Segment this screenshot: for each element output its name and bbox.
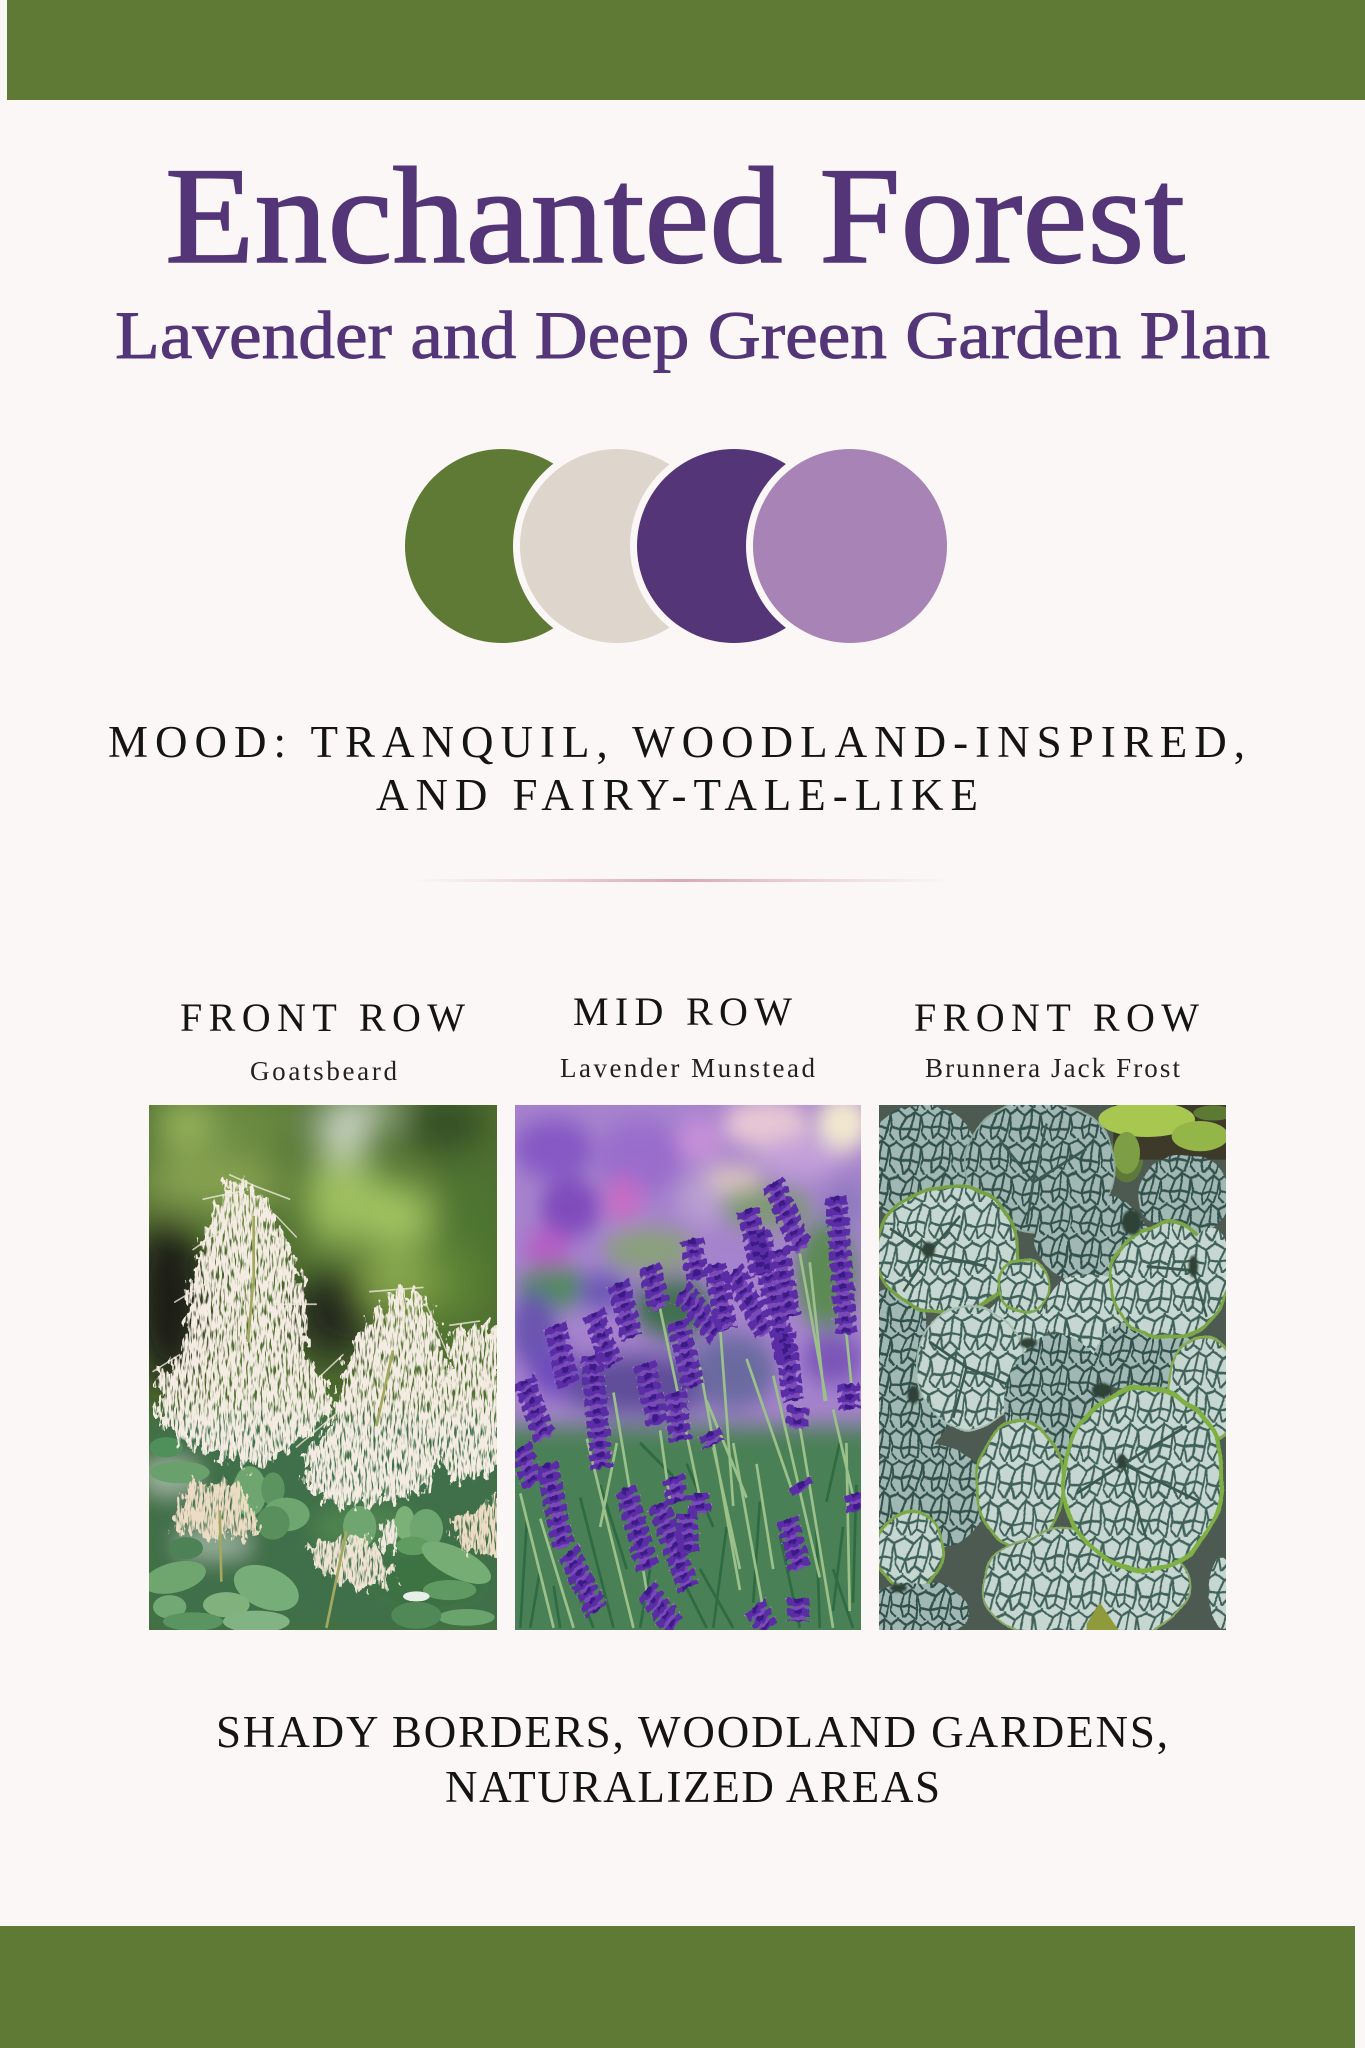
plant name: goatsbeard: Goatsbeard	[250, 1056, 398, 1086]
white plumes	[156, 1178, 500, 1506]
heading: front row: FRONT ROW	[914, 995, 1199, 1040]
colour palette circles	[405, 449, 947, 643]
column: goatsbeard	[133, 995, 510, 1636]
variegated leaves	[843, 1100, 1238, 1645]
stems	[220, 1216, 393, 1628]
divider line	[414, 879, 948, 882]
mood statement	[108, 717, 1245, 820]
photo: goatsbeard	[149, 1105, 497, 1630]
mood statement: MOOD: TRANQUIL, WOODLAND-INSPIRED,	[108, 717, 1245, 767]
column: brunnera	[843, 995, 1238, 1645]
yellow leaf tip	[1087, 1603, 1118, 1630]
subtitle: Lavender and Deep Green Garden Plan	[115, 297, 1270, 373]
strands	[153, 1175, 480, 1447]
plant name: lavender munstead: Lavender Munstead	[560, 1053, 816, 1083]
heading: front row: FRONT ROW	[180, 995, 465, 1040]
leaf midribs	[890, 1123, 1207, 1540]
grass blades	[520, 1443, 856, 1628]
leaf sinuses	[890, 1210, 1198, 1592]
lime leaves	[1098, 1102, 1233, 1182]
bottom green band	[0, 1926, 1355, 2048]
top green band	[7, 0, 1365, 100]
title: Enchanted Forest	[165, 139, 1185, 292]
column: lavender	[500, 989, 880, 1653]
photo: lavender	[515, 1105, 861, 1630]
usage note	[216, 1707, 1168, 1812]
usage note: NATURALIZED AREAS	[445, 1762, 940, 1812]
mood statement: AND FAIRY-TALE-LIKE	[376, 770, 978, 820]
photo: brunnera	[879, 1105, 1226, 1630]
plant name: brunnera jack frost: Brunnera Jack Frost	[925, 1053, 1180, 1083]
leaves	[141, 1437, 495, 1633]
usage note: SHADY BORDERS, WOODLAND GARDENS,	[216, 1707, 1168, 1757]
lavender spikes	[520, 1182, 858, 1630]
heading: mid row: MID ROW	[573, 989, 792, 1034]
